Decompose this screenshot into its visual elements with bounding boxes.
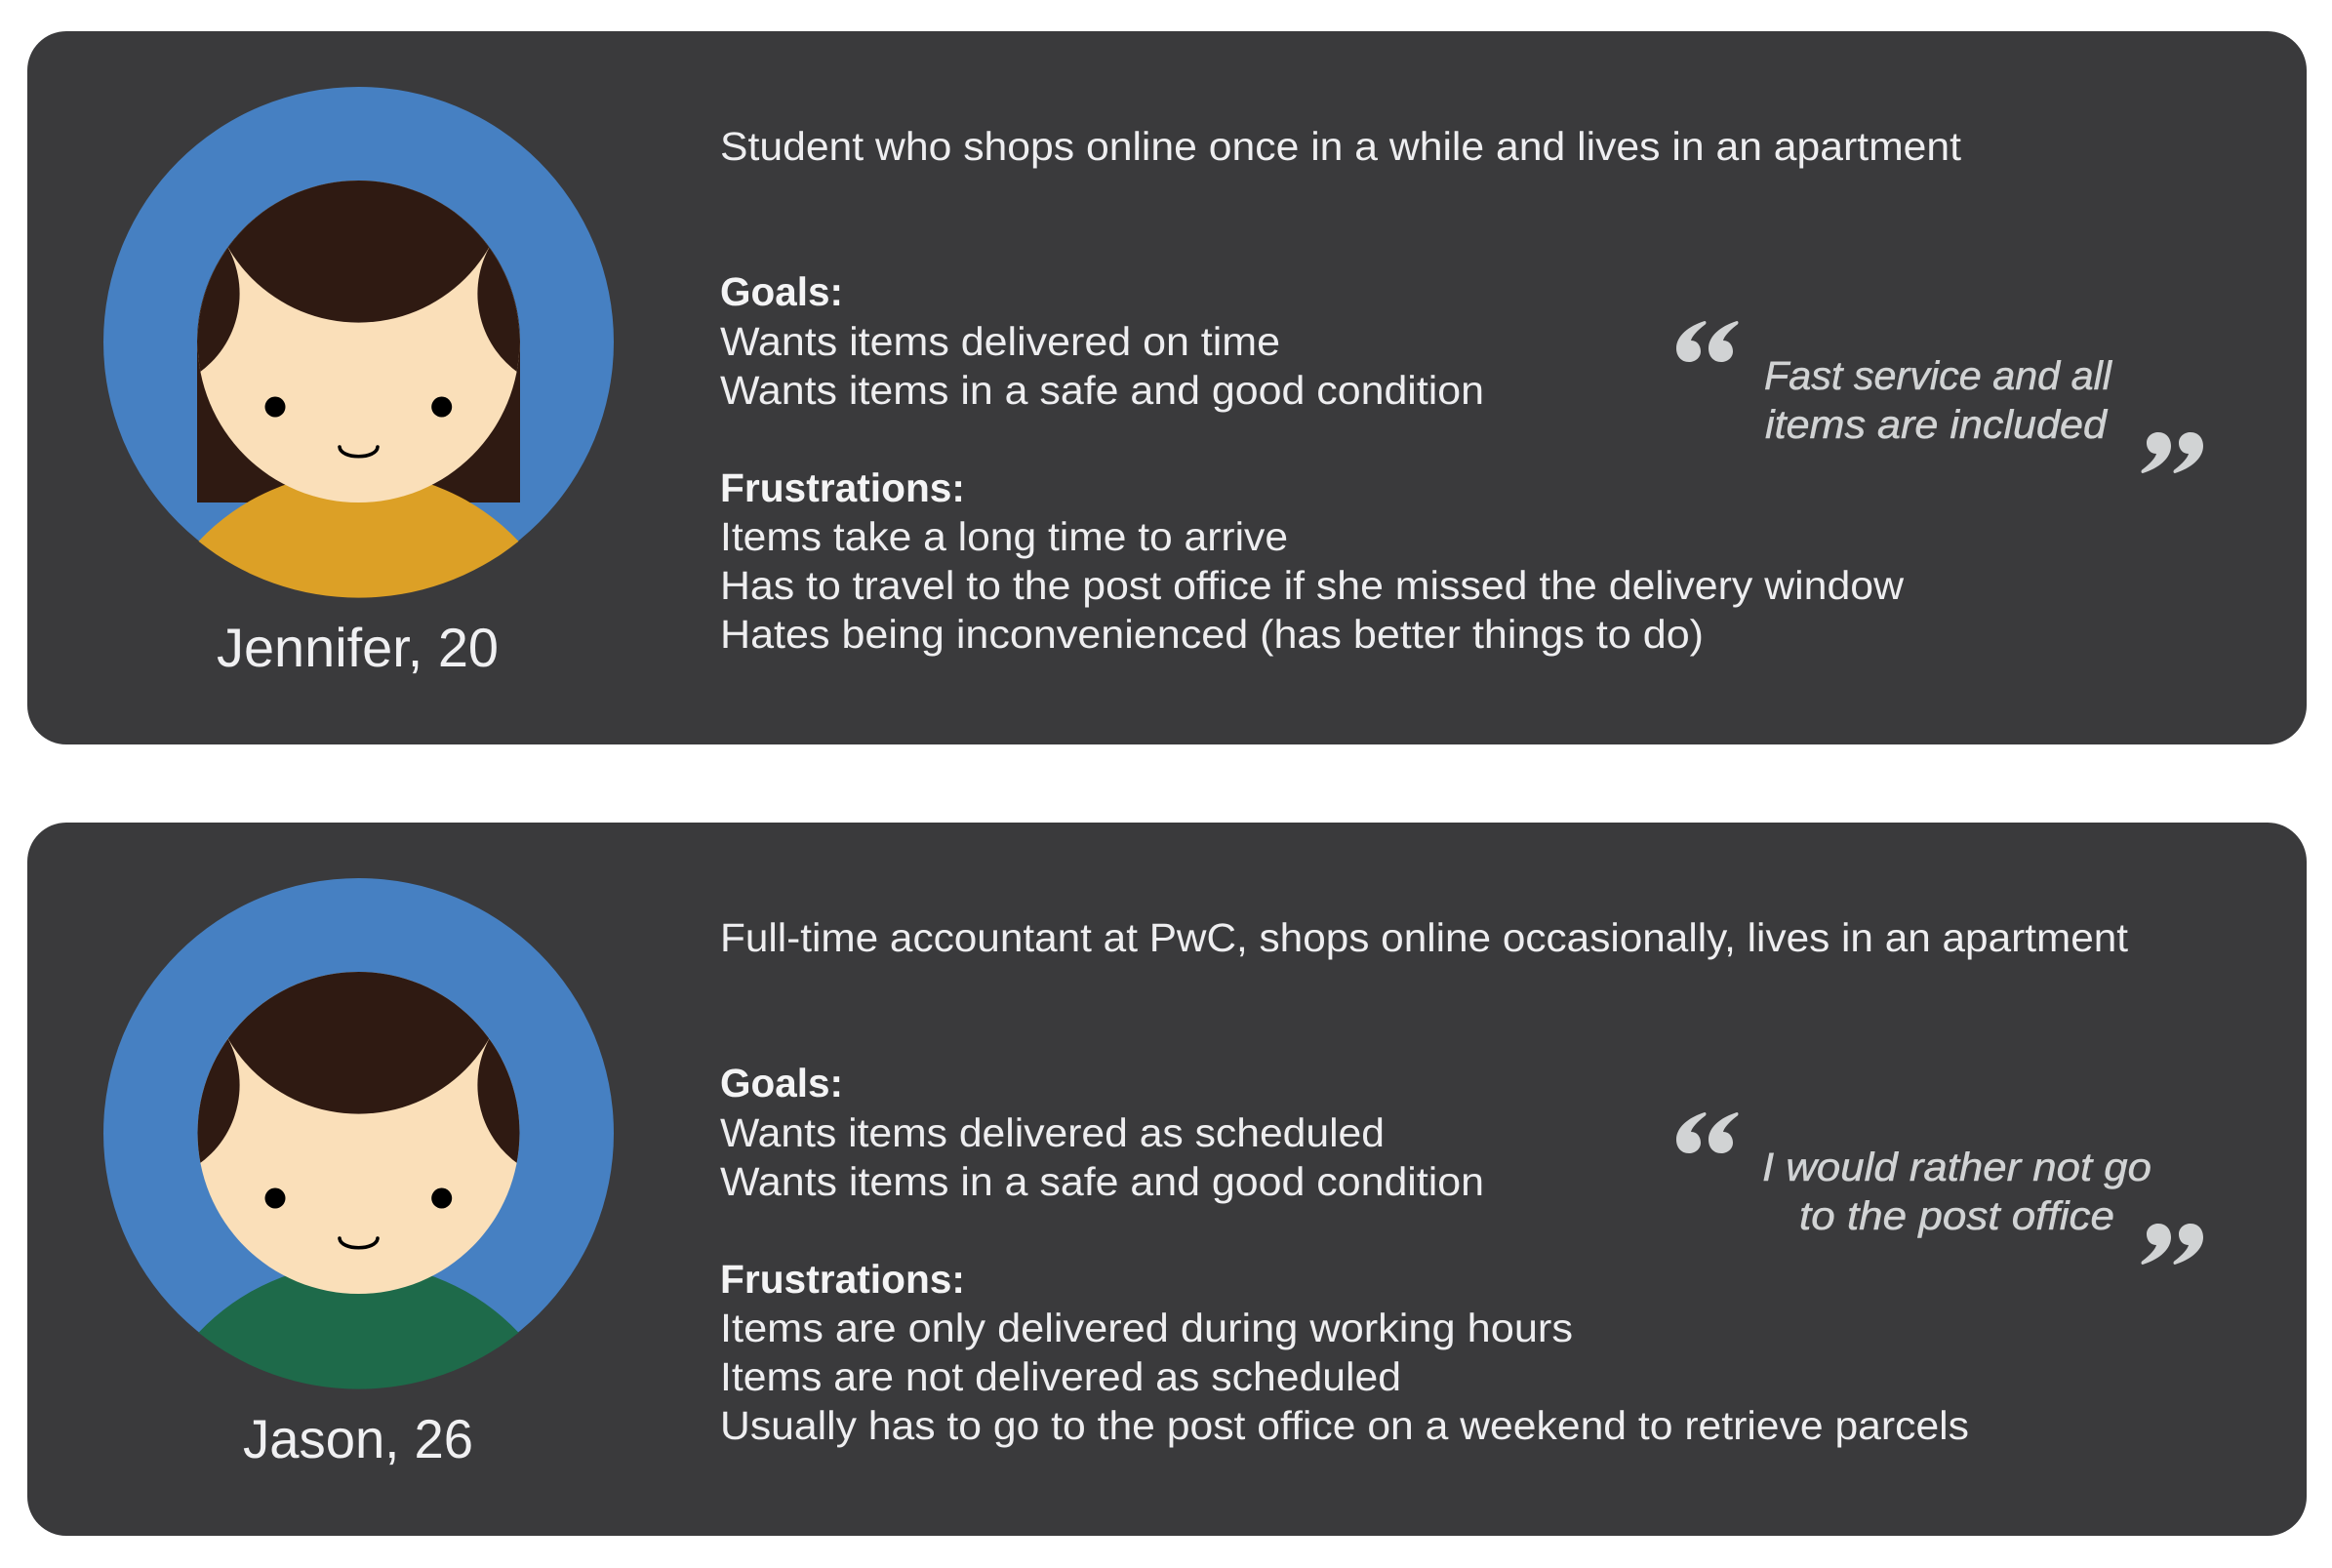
quote: Jason: to the post office: [1799, 1193, 2114, 1238]
icon: opening quotation mark: [1676, 321, 1739, 362]
description: Jennifer: Student who shops online once in a while and lives in an apartment: [720, 124, 1962, 169]
panel: Jennifer persona: [27, 20, 2307, 744]
text block: Jason goals: [720, 1061, 1484, 1204]
text block: Jennifer frustrations: Has to travel to the post office if she missed the delivery window: [720, 563, 1904, 608]
icon: Jason avatar: [103, 878, 614, 1389]
text block: Jennifer frustrations: Items take a long time to arrive: [720, 514, 1288, 559]
text block: Jason frustrations: Items are not delivered as scheduled: [720, 1354, 1401, 1399]
card background: Jason: [27, 823, 2307, 1536]
text block: Jennifer frustrations: Hates being inconvenienced (has better things to do): [720, 612, 1704, 657]
name: Jason: Jason, 26: [243, 1408, 473, 1469]
icon: closing quotation mark: [2141, 1224, 2203, 1265]
text block: Jason goals: Goals:: [720, 1061, 843, 1106]
text block: Jason frustrations: [720, 1257, 1969, 1448]
text block: Jason goals: Wants items delivered as scheduled: [720, 1110, 1385, 1155]
quote: Jennifer: Fast service and all: [1764, 353, 2113, 398]
quote: Jennifer: [1764, 353, 2113, 447]
description: Jason: Full-time accountant at PwC, shops online occasionally, lives in an apartment: [720, 915, 2129, 960]
icon: closing quotation mark: [2141, 432, 2203, 473]
text block: Jason frustrations: Items are only delivered during working hours: [720, 1306, 1573, 1350]
quote: Jason: [1762, 1145, 2151, 1238]
quote: Jennifer: items are included: [1765, 402, 2108, 447]
icon: Jennifer avatar: [103, 87, 614, 598]
text block: Jennifer goals: Wants items in a safe and good condition: [720, 368, 1484, 413]
icon: opening quotation mark: [1676, 1112, 1739, 1153]
text block: Jason frustrations: Usually has to go to the post office on a weekend to retrieve parcels: [720, 1403, 1969, 1448]
quote: Jason: I would rather not go: [1762, 1145, 2151, 1189]
text block: Jason goals: Wants items in a safe and good condition: [720, 1159, 1484, 1204]
text block: Jennifer goals: [720, 269, 1484, 413]
panel: Jason persona: [27, 812, 2307, 1536]
text block: Jason frustrations: Frustrations:: [720, 1257, 965, 1302]
text block: Jennifer goals: Goals:: [720, 269, 843, 314]
text block: Jennifer goals: Wants items delivered on time: [720, 319, 1280, 364]
text block: Jennifer frustrations: [720, 465, 1904, 657]
text block: Jennifer frustrations: Frustrations:: [720, 465, 965, 510]
name: Jennifer: Jennifer, 20: [217, 617, 499, 678]
card background: Jennifer: [27, 31, 2307, 744]
